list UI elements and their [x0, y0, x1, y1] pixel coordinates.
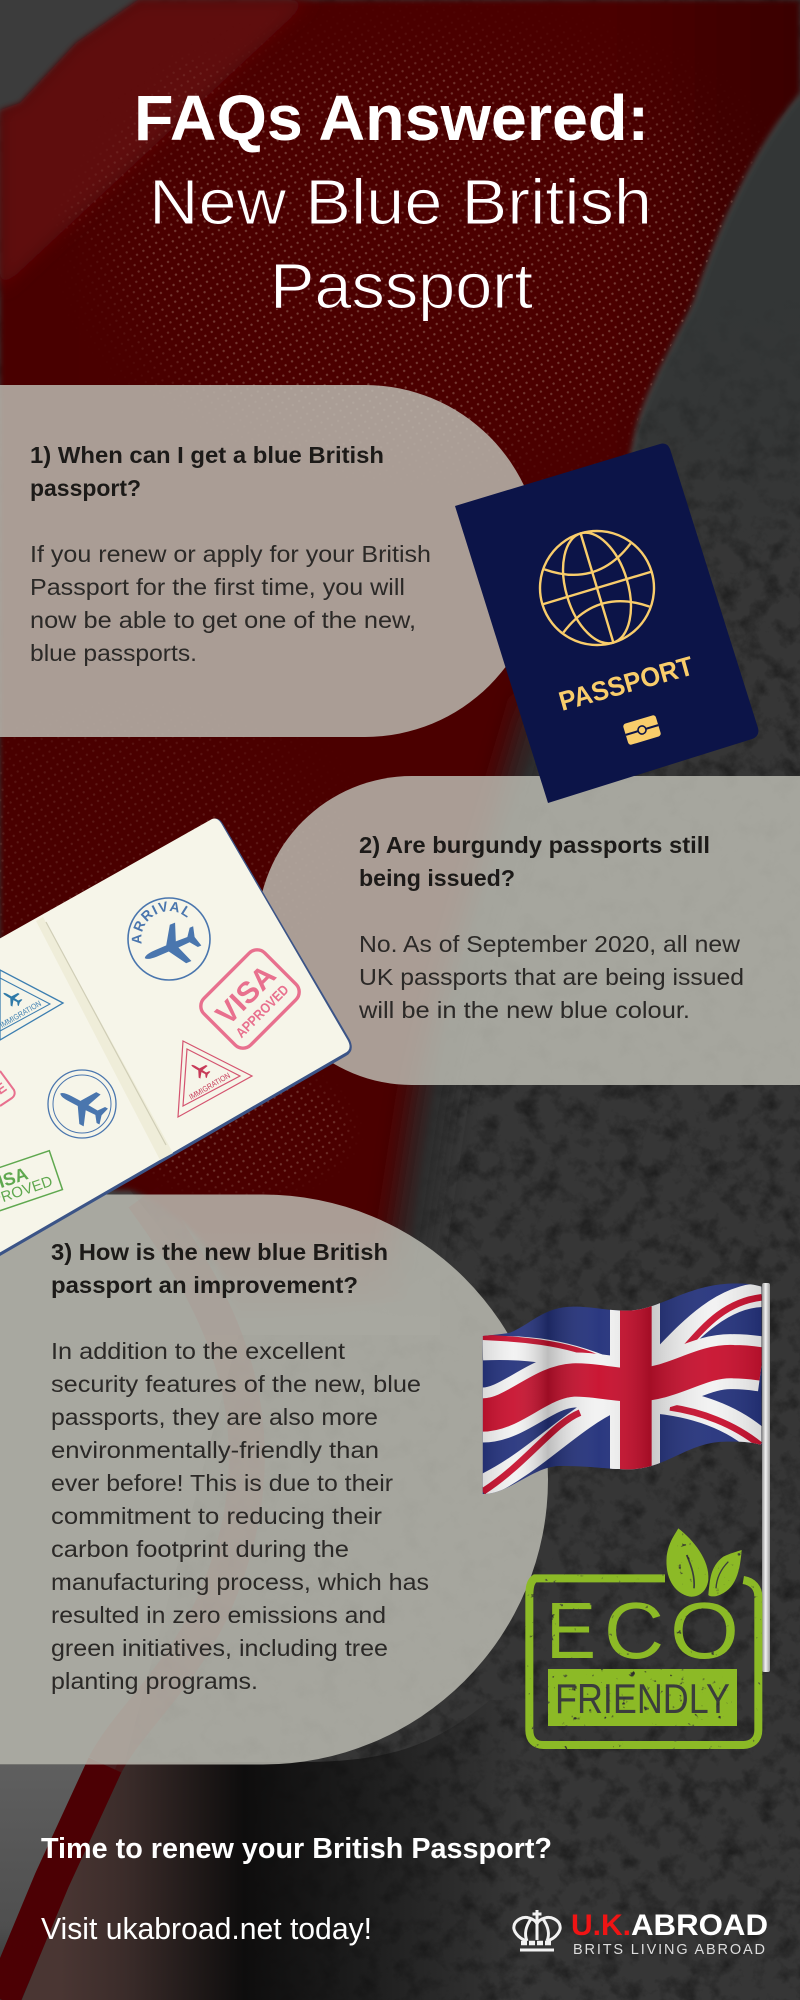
icon: eco friendly badge [529, 1528, 758, 1745]
question 3 answer: In addition to the excellent [51, 1338, 346, 1364]
friendly word: FRIENDLY [555, 1675, 730, 1722]
icon: blue passport [455, 444, 758, 803]
call to action link: Visit ukabroad.net today! [41, 1911, 372, 1946]
question 1 answer [30, 541, 431, 666]
question 2 heading [359, 832, 710, 891]
question 1 answer: now be able to get one of the new, [30, 607, 416, 633]
eco word [546, 1586, 739, 1675]
stamp: immigration red: IMMIGRATION [188, 1071, 232, 1102]
question 1 answer: blue passports. [30, 640, 197, 666]
logo: U.K. Abroad: ABROAD [631, 1909, 768, 1942]
question 3 answer: ever before! This is due to their [51, 1470, 393, 1496]
question 3 answer: green initiatives, including tree [51, 1635, 388, 1661]
flagpole [762, 1283, 770, 1672]
logo tagline: BRITS LIVING ABROAD [573, 1942, 765, 1958]
icon: open passport with stamps [0, 818, 352, 1256]
panel: question 2 [258, 776, 800, 1085]
question 1 answer: Passport for the first time, you will [30, 574, 405, 600]
title: Passport [270, 250, 533, 322]
question 1 heading: passport? [30, 475, 141, 501]
question 2 heading: being issued? [359, 865, 515, 891]
passport label: PASSPORT [556, 651, 697, 717]
question 2 answer: will be in the new blue colour. [358, 997, 690, 1023]
question 3 answer: security features of the new, blue [51, 1371, 421, 1397]
question 3 answer [51, 1338, 429, 1694]
stamp: arrival [127, 897, 211, 981]
stamp: visa approved red: APPROVED [232, 981, 292, 1041]
question 3 heading: passport an improvement? [51, 1272, 358, 1298]
question 3 answer: commitment to reducing their [51, 1503, 382, 1529]
stamp: immigration red [178, 1041, 252, 1117]
question 2 answer [358, 931, 744, 1023]
question 1 answer: If you renew or apply for your British [30, 541, 431, 567]
stamp: visa approved red [196, 945, 304, 1053]
question 3 answer: carbon footprint during the [51, 1536, 349, 1562]
stamp: clipped red [0, 1071, 15, 1106]
question 3 answer: resulted in zero emissions and [51, 1602, 386, 1628]
icon: globe [526, 517, 668, 659]
panel: question 1 [0, 385, 541, 737]
stamp: arrival: ARRIVAL [132, 901, 188, 944]
question 2 answer: UK passports that are being issued [359, 964, 744, 990]
question 3 heading: 3) How is the new blue British [51, 1239, 388, 1265]
logo: U.K. Abroad [514, 1909, 768, 1958]
stamp: visa approved red: VISA [210, 959, 283, 1032]
stamp: immigration blue: IMMIGRATION [0, 999, 43, 1030]
icon: biometric chip [623, 715, 661, 745]
question 3 answer: environmentally-friendly than [51, 1437, 379, 1463]
question 1 heading: 1) When can I get a blue British [30, 442, 384, 468]
icon: leaves [666, 1528, 742, 1597]
stamp: immigration blue [0, 970, 63, 1040]
eco word: C [604, 1586, 664, 1675]
title [134, 82, 652, 322]
stamp: plane circle [48, 1070, 116, 1138]
question 3 answer: manufacturing process, which has [51, 1569, 429, 1595]
question 3 answer: planting programs. [51, 1668, 258, 1694]
call to action heading: Time to renew your British Passport? [41, 1833, 552, 1865]
eco word: O [670, 1586, 739, 1675]
icon: crown [514, 1910, 560, 1950]
question 3 answer: passports, they are also more [51, 1404, 378, 1430]
question 1 heading [30, 442, 384, 501]
title: New Blue British [149, 166, 652, 238]
title: FAQs Answered: [134, 82, 649, 154]
question 3 heading [51, 1239, 388, 1298]
question 2 answer: No. As of September 2020, all new [359, 931, 740, 957]
stamp: visa approved green [0, 1151, 62, 1219]
question 2 heading: 2) Are burgundy passports still [359, 832, 710, 858]
panel: question 3 [0, 1194, 548, 1764]
logo wordmark: U.K. [571, 1909, 631, 1942]
eco word: E [546, 1586, 596, 1675]
icon: union jack flag [480, 1280, 770, 1672]
